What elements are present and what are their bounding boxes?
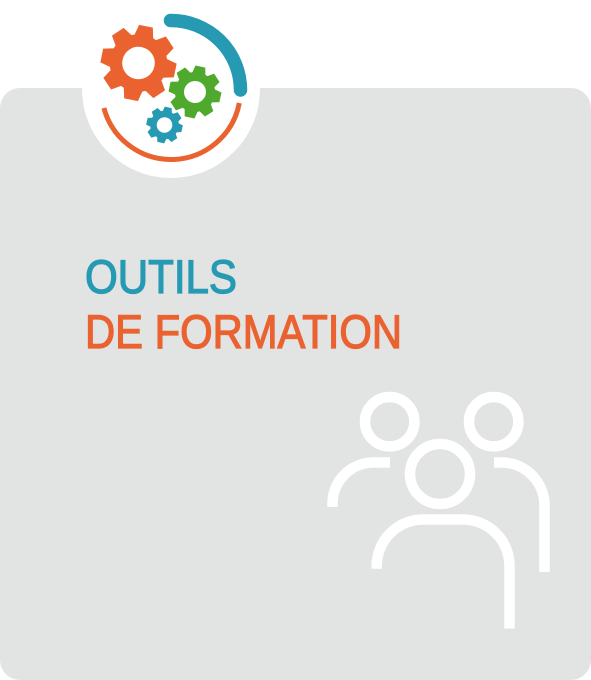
heading: OUTILS: OUTILS (85, 250, 237, 303)
badge: white circle behind gears (82, 0, 260, 178)
right person (469, 397, 544, 572)
left person (332, 397, 414, 507)
icon: group of three people (332, 397, 544, 628)
icon: orange lower arc (104, 103, 239, 159)
icon: large orange gear (94, 19, 183, 107)
heading: DE FORMATION: DE FORMATION (85, 305, 402, 358)
icon: small blue gear (143, 104, 186, 146)
icon: medium green gear (164, 61, 226, 123)
icon: blue progress arc (170, 20, 240, 90)
centre person (377, 444, 510, 628)
